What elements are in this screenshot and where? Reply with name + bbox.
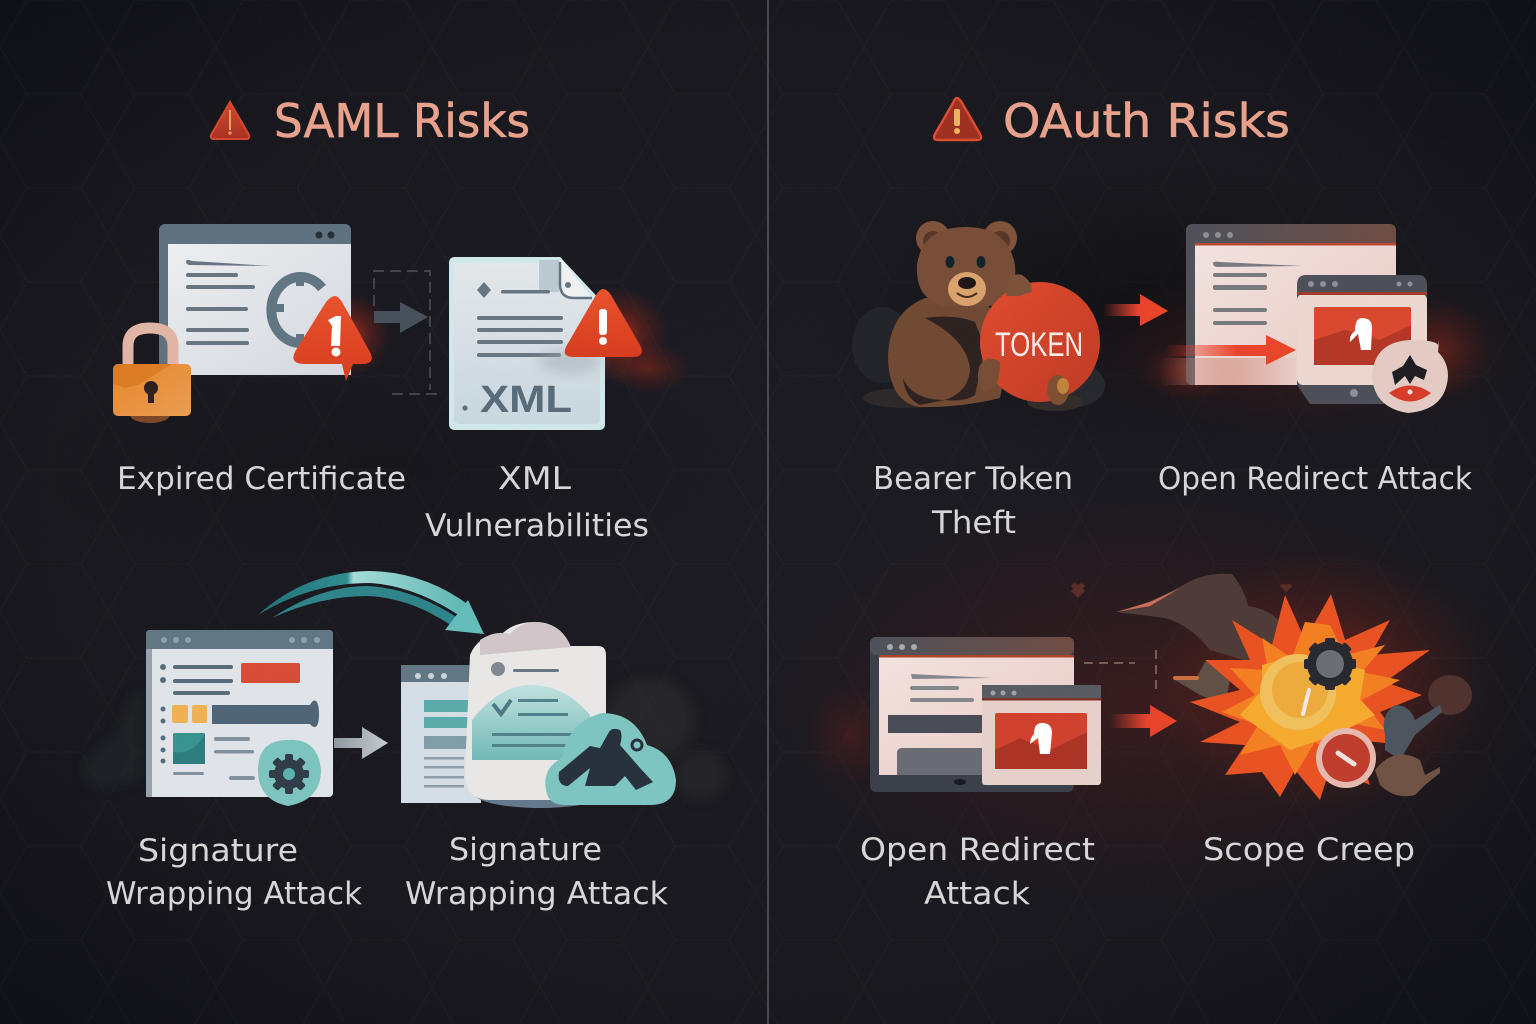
arrow: dashed connector [1084, 650, 1156, 695]
label: Scope Creep: Scope Creep [1203, 832, 1415, 868]
label: XML Vulnerabilities: Vulnerabilities [425, 508, 649, 544]
label: Bearer Token Theft: Bearer Token [873, 461, 1073, 497]
label: Bearer Token Theft [873, 461, 1073, 541]
heading: OAuth Risks: OAuth Risks [1003, 94, 1290, 148]
panel: OAuth Risks [805, 94, 1490, 912]
label: XML Vulnerabilities: XML [498, 461, 572, 497]
label: TOKEN on coin: TOKEN [995, 326, 1083, 364]
arrow: red token flow [1103, 294, 1168, 326]
icon: XML document [449, 257, 692, 430]
label: Open Redirect Attack (bottom) [860, 832, 1095, 912]
icon: open redirect browser [1140, 224, 1490, 413]
label: XML on document: XML [480, 379, 572, 421]
label: Signature Wrapping Attack (left): Signature [138, 833, 298, 869]
arrow: dashed transition [374, 271, 440, 394]
arrow: red redirect flow [1110, 705, 1177, 737]
label: Open Redirect Attack (top): Open Redirect Attack [1158, 461, 1472, 497]
label: Signature Wrapping Attack (right): Wrapping Attack [405, 876, 668, 912]
label: Open Redirect Attack (bottom): Attack [924, 876, 1030, 912]
label: Signature Wrapping Attack (right) [405, 832, 668, 912]
icon: padlock [113, 328, 191, 423]
label: Bearer Token Theft: Theft [931, 505, 1016, 541]
label: Signature Wrapping Attack (right): Signature [449, 832, 602, 868]
arrow: grey signature [334, 727, 388, 759]
icon: signed browser window [84, 630, 333, 797]
icon: gear badge [258, 740, 321, 806]
icon: tampered documents [401, 622, 726, 808]
label: XML Vulnerabilities [425, 461, 649, 544]
icon: expired certificate browser [159, 224, 390, 381]
icon: bear with token [852, 221, 1105, 411]
icon: scope creep explosion [1071, 550, 1490, 810]
panel: SAML Risks [84, 94, 726, 912]
label: Open Redirect Attack (bottom): Open Redirect [860, 832, 1095, 868]
label: Signature Wrapping Attack (left): Wrapping Attack [106, 876, 362, 912]
heading: SAML Risks: SAML Risks [274, 94, 530, 148]
icon: redirect browser windows [805, 637, 1101, 792]
arrow: teal curved [258, 571, 484, 634]
label: Signature Wrapping Attack (left) [106, 833, 362, 912]
label: Expired Certificate: Expired Certificate [117, 461, 406, 497]
